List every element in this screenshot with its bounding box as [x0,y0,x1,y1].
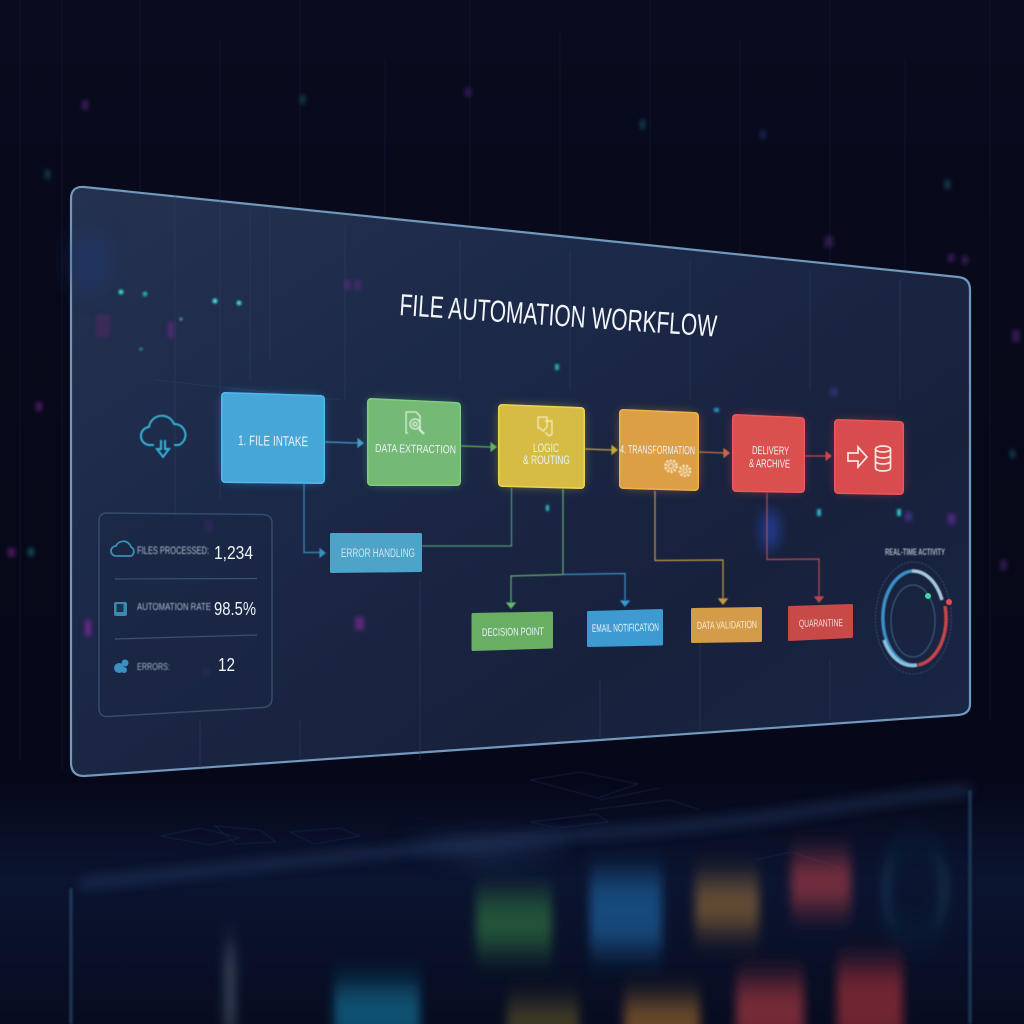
icon: database [876,446,890,471]
panel: real-time activity [876,547,952,674]
icon: gears [666,460,690,476]
arrow: intake to error handling [304,484,325,557]
arrow: logic to decision [507,489,563,608]
heading: real-time activity: REAL-TIME ACTIVITY [885,547,945,557]
icon: document search [406,412,424,434]
box: file intake: 1. FILE INTAKE [238,432,308,449]
glass panel [71,187,970,776]
box: file intake [225,396,321,480]
icon: gears [114,660,128,673]
box: logic and routing: LOGIC [533,443,559,455]
arrow: logic to email [563,574,629,606]
box: logic and routing [502,408,581,485]
reflection: lower row boxes [476,845,945,950]
stat: files processed: FILES PROCESSED: [137,545,209,557]
arrow: transformation to delivery [699,449,729,457]
box: error handling: ERROR HANDLING [341,548,415,560]
box: logic and routing: & ROUTING [523,455,570,467]
floor reflection band [80,790,970,884]
line: error handling to logic [422,488,512,546]
arrow: logic to transformation [585,446,617,454]
stat: files processed [111,541,253,563]
stat: errors [114,655,235,675]
icon: square [114,602,127,616]
stat: automation rate: AUTOMATION RATE [137,601,211,613]
box: quarantine: QUARANTINE [799,617,843,630]
icon: routing [538,417,552,436]
title: FILE AUTOMATION WORKFLOW [399,288,718,344]
box: data validation: DATA VALIDATION [697,619,757,632]
icon: cloud [111,541,134,556]
stat: automation rate: 98.5% [214,599,256,619]
connectors [304,439,831,608]
box: transformation: 4. TRANSFORMATION [620,444,695,457]
box: delivery and archive: & ARCHIVE [749,458,790,471]
box: destination [838,423,900,491]
stat: errors: 12 [218,655,235,675]
box: delivery and archive [736,418,801,489]
status dots [925,593,931,599]
box: quarantine [790,606,852,640]
reflection: panel edges [71,790,970,1024]
box: email notification [588,610,662,646]
icon: cloud download [141,416,185,457]
arrow: transformation to validation [655,491,727,604]
scattered particles [118,290,901,516]
box glows [225,396,900,491]
floor [80,772,970,884]
box: email notification: EMAIL NOTIFICATION [592,622,659,635]
arrow: intake to extraction [325,439,363,447]
box: data extraction: DATA EXTRACTION [375,443,456,456]
dividers [115,578,257,639]
box: decision point: DECISION POINT [482,626,544,639]
box: decision point [473,613,552,650]
box: data validation [692,608,760,642]
box: transformation [620,413,695,487]
gauge ring [876,562,952,674]
circuit texture [155,195,900,770]
reflection: upper row boxes [224,945,903,1024]
box: data extraction [371,402,457,482]
arrow: delivery to quarantine [767,493,823,602]
box: error handling [332,534,420,572]
arrow: delivery to destination [805,452,831,460]
box: delivery and archive: DELIVERY [752,445,789,458]
stat: automation rate [114,599,256,619]
icon: arrow [848,447,867,467]
stat: files processed: 1,234 [214,543,253,563]
panel: stats [99,513,272,717]
arrow: extraction to logic [461,443,496,451]
stat: errors: ERRORS: [137,661,170,673]
